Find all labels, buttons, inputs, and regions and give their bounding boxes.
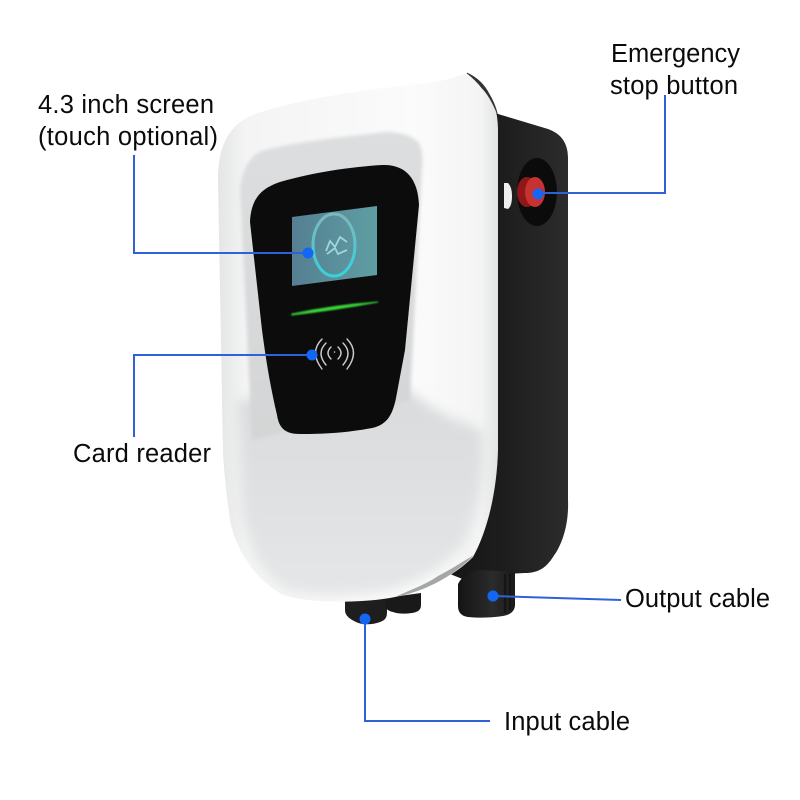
callout: 4.3 inch screen — [38, 91, 314, 258]
leader dot: emergency stop — [532, 188, 544, 200]
touch screen — [292, 206, 377, 286]
side slot — [504, 183, 512, 209]
label: touch optional: (touch optional) — [38, 123, 218, 151]
leader dot: screen — [302, 248, 314, 258]
leader line: input cable — [365, 619, 490, 721]
leader line: card reader — [134, 355, 312, 437]
green status light — [292, 302, 378, 315]
cable gland: middle — [385, 593, 421, 614]
label: screen: 4.3 inch screen — [38, 91, 214, 119]
callout: emergency stop button — [532, 40, 740, 200]
cable gland: left input — [345, 598, 387, 624]
label: card reader: Card reader — [73, 440, 212, 468]
cable gland: output — [458, 570, 515, 618]
shell top edge shadow — [467, 73, 497, 113]
leader line: emergency stop — [538, 95, 665, 193]
callout: input cable — [360, 614, 630, 736]
shell shading — [238, 132, 483, 597]
screen car glyph — [326, 237, 347, 254]
label: emergency: Emergency — [611, 40, 740, 68]
black rear housing — [440, 90, 568, 582]
emergency stop button — [517, 158, 557, 226]
icon: contactless card reader — [316, 339, 354, 369]
leader dot: output cable — [488, 590, 498, 602]
label: output cable: Output cable — [625, 585, 770, 613]
label: stop button: stop button — [610, 72, 738, 100]
label: input cable: Input cable — [504, 708, 630, 736]
leader line: output cable — [493, 596, 621, 600]
black display panel — [250, 165, 419, 434]
screen ring graphic — [313, 214, 355, 276]
callout: output cable — [488, 585, 770, 613]
white front shell — [218, 73, 498, 602]
callout: card reader — [73, 350, 318, 468]
lower plate — [238, 390, 483, 594]
leader dot: input cable — [360, 614, 370, 624]
shell bottom rim — [395, 555, 474, 597]
leader line: screen — [134, 155, 308, 253]
charger device — [218, 73, 568, 624]
recessed face — [240, 132, 422, 440]
leader dot: card reader — [306, 350, 318, 360]
